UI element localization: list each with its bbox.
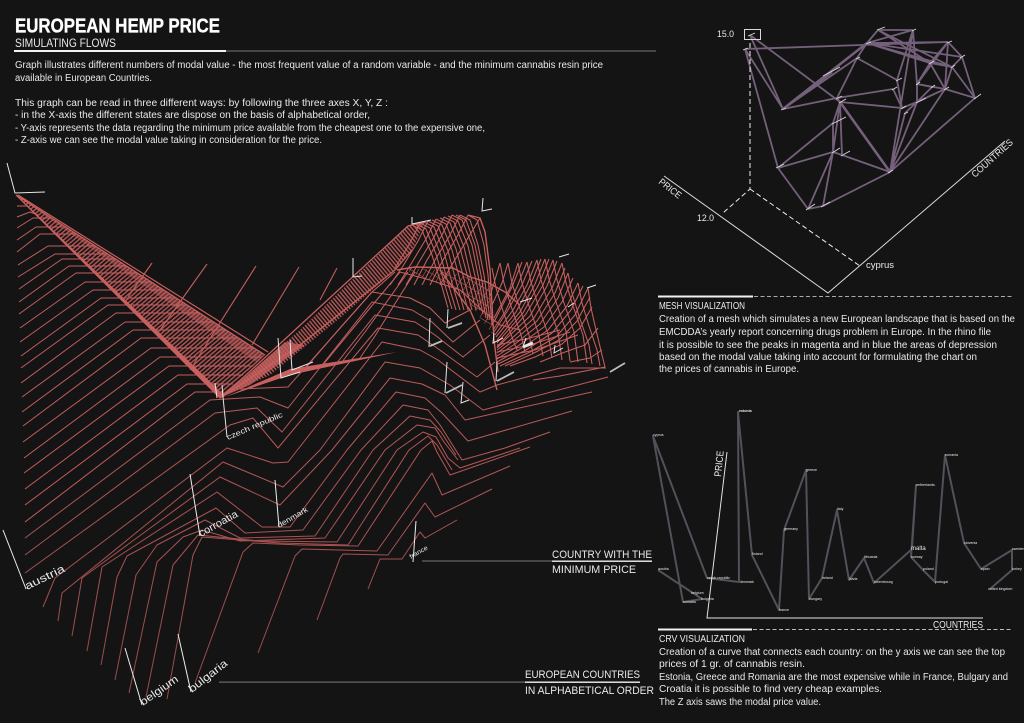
mesh node ticks <box>743 27 981 210</box>
country point labels: poland <box>923 567 934 571</box>
value label 12.0: 12.0 <box>697 213 714 224</box>
title rule <box>14 50 656 52</box>
axis label: price: PRICE <box>713 450 727 477</box>
crossing mesh behind the central peak <box>400 268 493 335</box>
curve visualization text: Estonia, Greece and Romania are the most expensive while in France, Bulgary and <box>659 672 1008 683</box>
intro text: - Z-axis we can see the modal value taking in consideration for the price. <box>15 135 322 146</box>
country point labels: estonia <box>739 409 753 413</box>
country point labels: austria <box>658 567 669 571</box>
country point labels: netherlands <box>916 483 935 487</box>
country point labels: italy <box>837 507 844 511</box>
axes <box>664 141 1005 293</box>
value label 15.0: 15.0 <box>717 29 734 40</box>
callout: country with the minimum price <box>422 549 652 576</box>
country point labels: turkey <box>1012 567 1022 571</box>
mesh rule <box>658 296 1013 298</box>
country tick: belgium <box>125 648 142 705</box>
country label: austria: austria <box>23 563 68 593</box>
mesh visualization text: it is possible to see the peaks in magenta and in blue the areas of depression <box>659 340 997 351</box>
country point labels: portugal <box>935 580 948 584</box>
selected node box <box>744 30 760 40</box>
mesh visualization text <box>659 301 1015 375</box>
country point labels: denmark <box>740 580 754 584</box>
curve visualization text: The Z axis saws the modal price value. <box>659 697 821 708</box>
country point labels: germany <box>784 527 798 531</box>
callout: european countries in alphabetical order: EUROPEAN COUNTRIES <box>525 669 640 681</box>
country label: france: france <box>408 544 430 561</box>
dashed guide lines <box>723 43 860 266</box>
label cyprus: cyprus <box>866 260 894 271</box>
country point labels: spain <box>981 567 990 571</box>
country point labels: lithuania <box>864 555 877 559</box>
country tick: bulgaria <box>178 634 191 692</box>
country tick: austria <box>3 530 26 589</box>
title: EUROPEAN HEMP PRICE <box>15 16 220 38</box>
country label: denmark: denmark <box>276 505 310 530</box>
country point labels: cyprus <box>653 433 664 437</box>
mesh visualization text: EMCDDA’s yearly report concerning drugs problem in Europe. In the rhino file <box>659 327 991 338</box>
callout: european countries in alphabetical order <box>219 669 654 697</box>
country point labels: united kingdom <box>988 587 1012 591</box>
central hatched ridge surface <box>222 222 425 397</box>
country point labels: coroatia <box>683 600 696 604</box>
title block <box>14 16 656 52</box>
curve visualization text: prices of 1 gr. of cannabis resin. <box>659 659 805 670</box>
callout: country with the minimum price: COUNTRY WITH THE <box>552 549 652 561</box>
country point labels: malta <box>911 546 926 552</box>
main terrain chart <box>3 163 625 708</box>
country point labels: latvia <box>849 577 857 581</box>
axis label: countries: COUNTRIES <box>933 620 983 631</box>
curve visualization text: Croatia it is possible to find very cheap examples. <box>659 684 882 695</box>
country point labels: romania <box>945 453 958 457</box>
price curve <box>653 412 1012 610</box>
curve rule <box>658 628 1013 630</box>
axes <box>707 452 983 618</box>
country point labels: luxembourg <box>874 580 893 584</box>
country label: belgium: belgium <box>138 673 181 708</box>
country tick: denmark <box>275 480 279 527</box>
mesh visualization text: based on the modal value taking into account for formulating the chart on <box>659 352 977 363</box>
mesh visualization text: MESH VISUALIZATION <box>659 301 745 312</box>
mesh emphasised edges <box>783 43 890 172</box>
axis label: price: PRICE <box>656 177 683 201</box>
country point labels: hungary <box>809 597 822 601</box>
callout: european countries in alphabetical order: IN ALPHABETICAL ORDER <box>525 685 654 697</box>
country point labels: slovenia <box>964 541 977 545</box>
country point labels: norway <box>911 555 923 559</box>
left hatched ridge surface <box>16 195 337 398</box>
mesh chart <box>656 27 1016 293</box>
country point labels: czech republic <box>707 576 730 580</box>
intro text: This graph can be read in three different ways: by following the three axes X, Y, Z : <box>15 98 388 109</box>
curve visualization text <box>659 634 1008 708</box>
country tick: corroatia <box>190 474 200 536</box>
intro text <box>15 60 603 146</box>
country point labels: belgium <box>691 591 704 595</box>
mesh visualization text: the prices of cannabis in Europe. <box>659 364 799 375</box>
subtitle: SIMULATING FLOWS <box>15 36 116 50</box>
country label: czech republic: czech republic <box>225 410 284 442</box>
white data ticks <box>7 163 625 437</box>
curve visualization text: CRV VISUALIZATION <box>659 634 745 645</box>
contour lines from the left edge <box>17 206 608 699</box>
country point labels: greece <box>806 468 817 472</box>
intro text: available in European Countries. <box>15 73 152 84</box>
country label: corroatia: corroatia <box>197 508 240 540</box>
mesh edges <box>745 30 975 209</box>
intro text: Graph illustrates different numbers of modal value - the most frequent value of a random variable - and the minimum cannabis resin price <box>15 60 603 71</box>
country point labels: finland <box>752 552 763 556</box>
curve chart <box>653 409 1024 631</box>
country point labels <box>653 409 1024 612</box>
country label: bulgaria: bulgaria <box>186 657 231 695</box>
country point labels: france <box>779 608 789 612</box>
right crossing mesh <box>390 215 605 390</box>
mesh visualization text: Creation of a mesh which simulates a new European landscape that is based on the <box>659 314 1015 325</box>
intro text: - in the X-axis the different states are dispose on the basis of alphabetical order, <box>15 110 370 121</box>
callout: country with the minimum price: MINIMUM PRICE <box>552 564 636 576</box>
intro text: - Y-axis represents the data regarding the minimum price available from the cheapest one to the expensive one, <box>15 123 485 134</box>
country point labels: bulgaria <box>701 597 714 601</box>
axis label: countries: COUNTRIES <box>970 137 1016 180</box>
country tick: france <box>413 521 416 562</box>
curve visualization text: Creation of a curve that connects each country: on the y axis we can see the top <box>659 647 1005 658</box>
country point labels: ireland <box>822 576 833 580</box>
